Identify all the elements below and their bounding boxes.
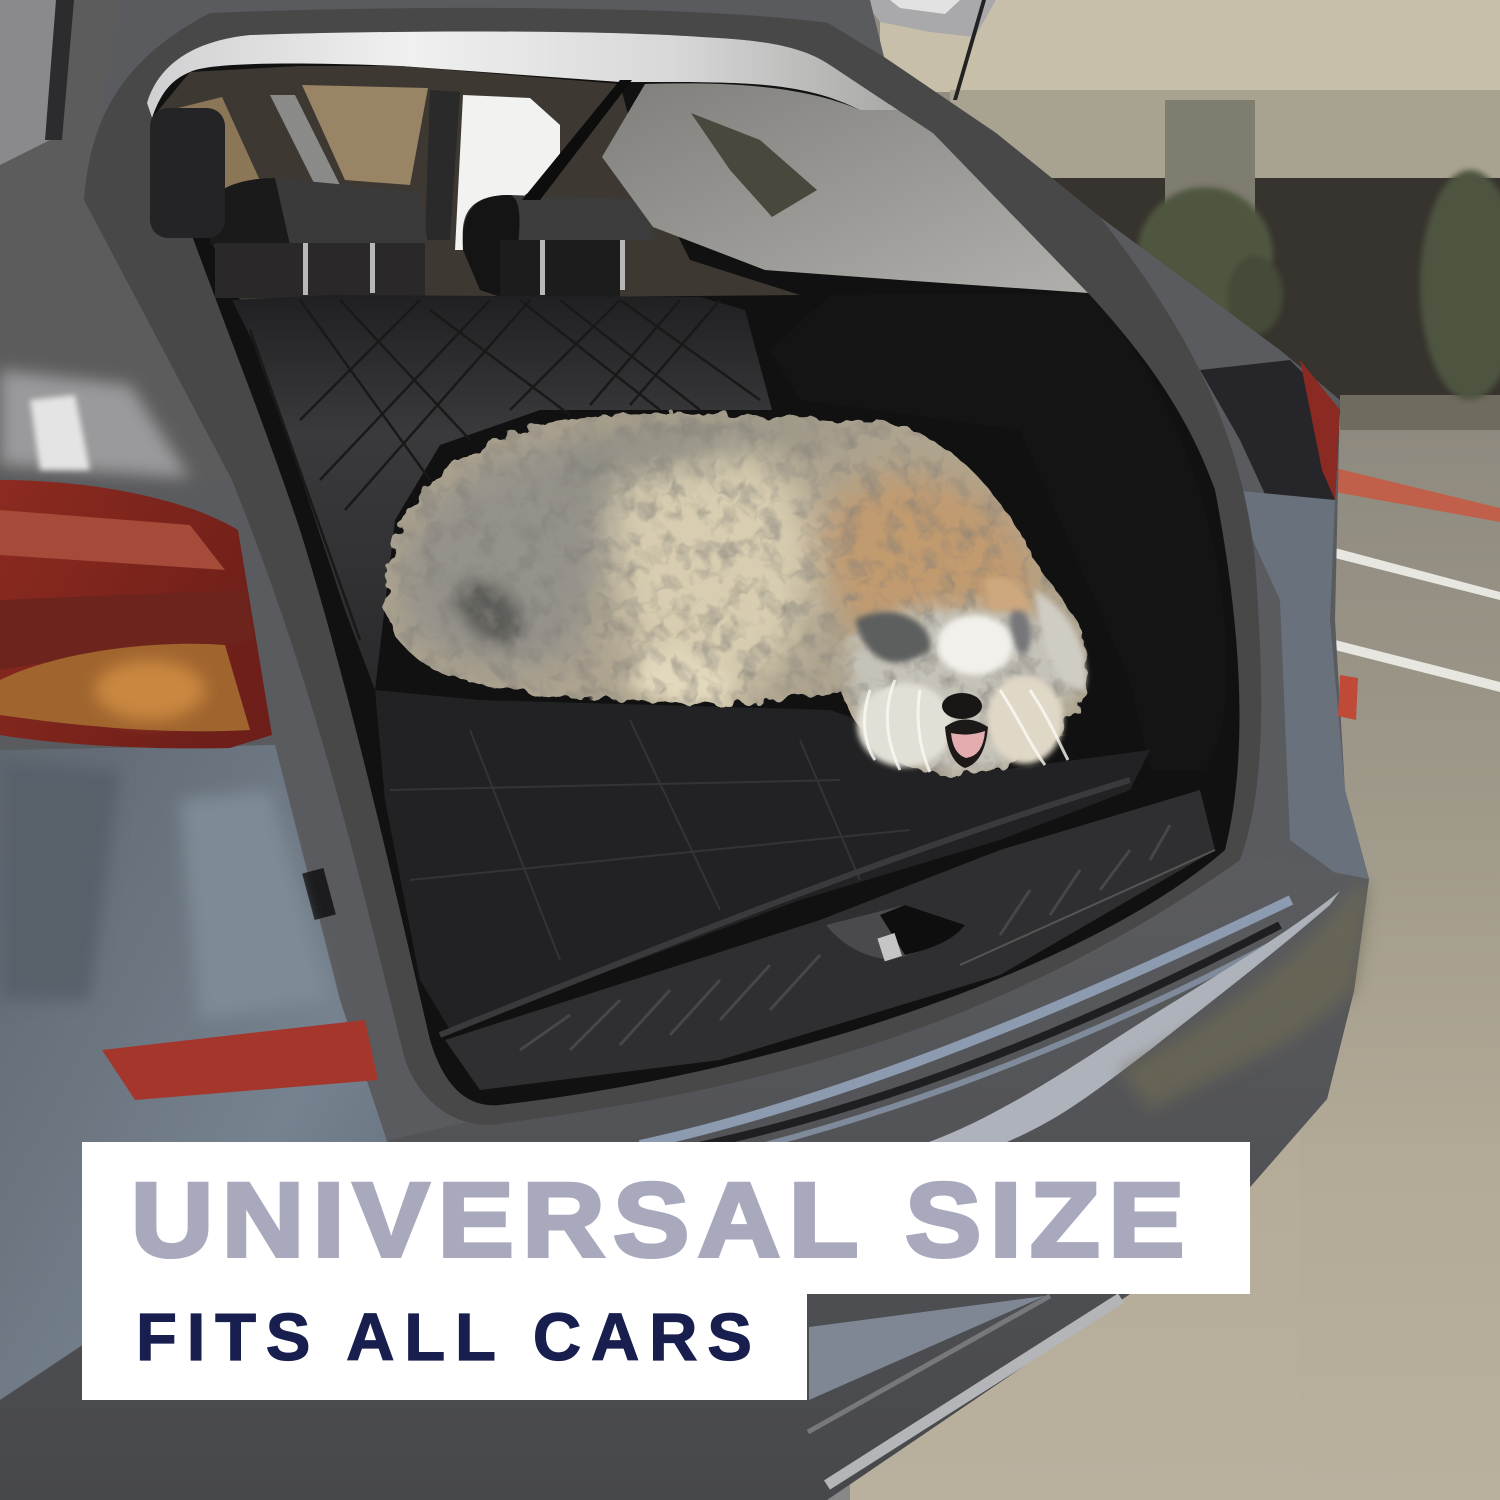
shelf window xyxy=(691,113,817,217)
subheading: fits all cars: FITS ALL CARS xyxy=(136,1300,752,1375)
cargo floor cover xyxy=(375,690,1150,1035)
dog nose and mouth xyxy=(942,693,988,768)
dog xyxy=(382,410,1090,778)
side panel xyxy=(770,293,1227,770)
caption box: large white banner xyxy=(82,1142,1250,1294)
seat strap xyxy=(522,80,632,200)
latch xyxy=(302,868,336,920)
headrests xyxy=(150,108,653,300)
rear reflector xyxy=(102,1020,378,1100)
bushes xyxy=(1137,170,1500,400)
taillight xyxy=(0,480,272,748)
bumper highlight band xyxy=(929,891,1340,1145)
trunk sill xyxy=(445,790,1215,1090)
heading: universal size: UNIVERSAL SIZE xyxy=(131,1162,1193,1279)
raised tailgate xyxy=(863,0,996,100)
trunk rim xyxy=(84,8,1261,1125)
background: parking garage xyxy=(850,0,1500,1500)
lower bumper xyxy=(0,858,1369,1500)
bumper corner reflection xyxy=(1120,879,1369,1110)
caption box: small white banner xyxy=(82,1294,807,1400)
trunk interior xyxy=(147,31,1239,1105)
seat back area and windows xyxy=(152,66,800,300)
beard whiskers xyxy=(865,680,1068,772)
ceiling light band xyxy=(147,31,898,118)
quilted seat cover xyxy=(232,295,772,690)
parking curb and lines xyxy=(1335,468,1500,692)
parcel shelf xyxy=(602,83,1088,293)
body shine xyxy=(0,760,330,1020)
